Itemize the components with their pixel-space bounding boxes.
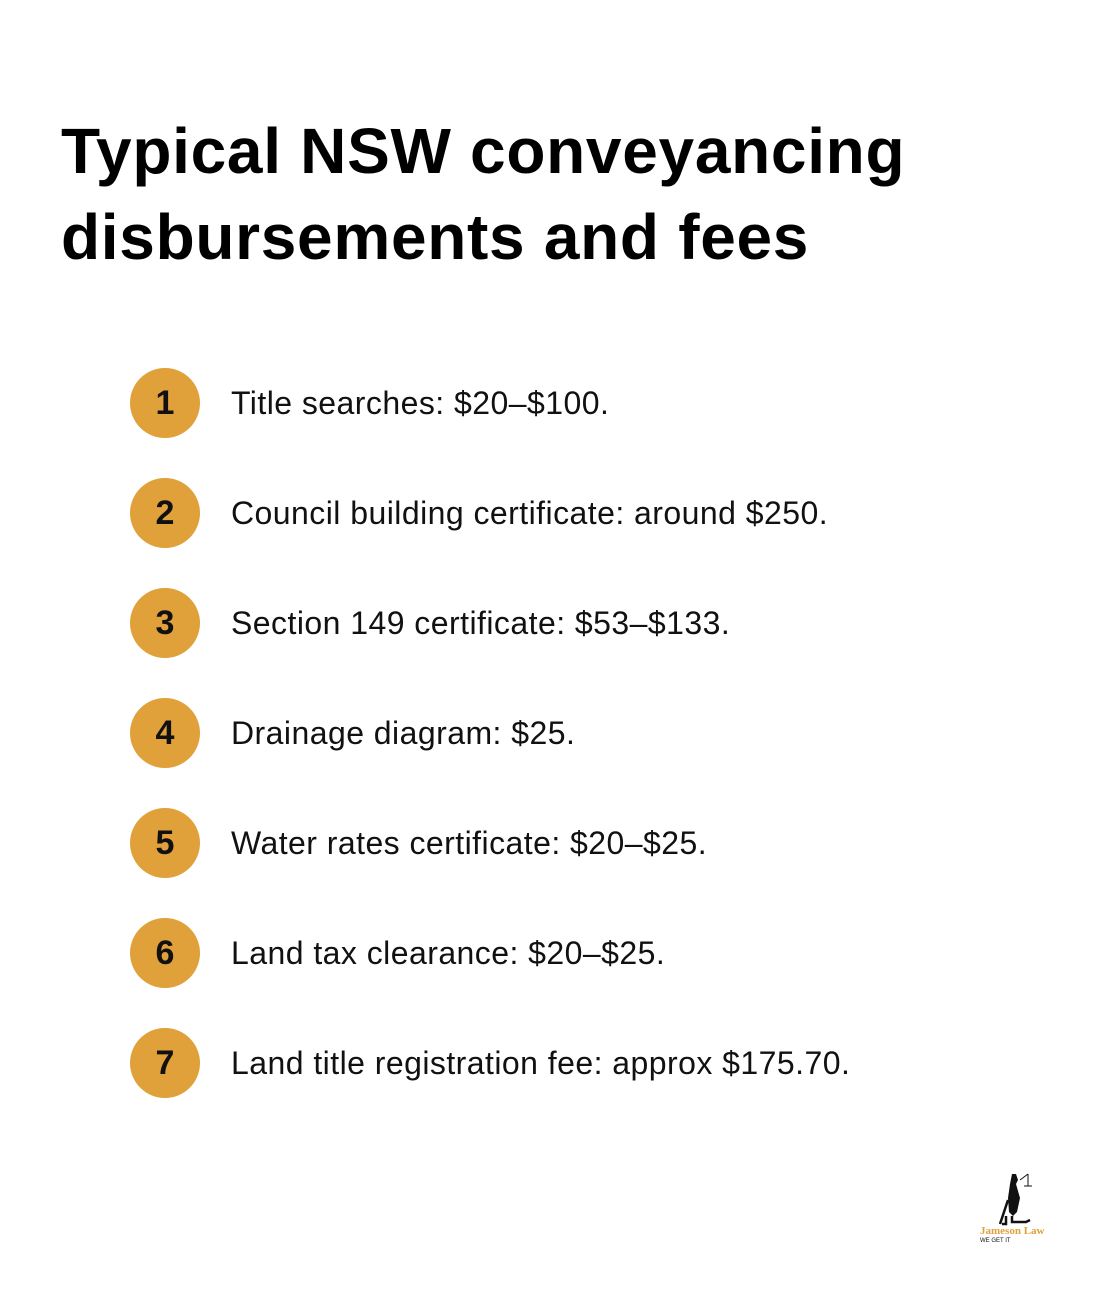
item 6: Land tax clearance: $20–$25. [231,935,665,971]
item 1 [130,368,609,438]
title: disbursements and fees [61,201,809,273]
item 4: Drainage diagram: $25. [231,715,575,751]
item 4: 4 [156,714,174,752]
item 2: Council building certificate: around $250. [231,495,828,531]
item 4 [130,698,575,768]
item 7 [130,1028,850,1098]
item 5 [130,808,707,878]
item 7: 7 [156,1044,174,1082]
item 5: 5 [156,824,174,862]
item 5: Water rates certificate: $20–$25. [231,825,707,861]
item 1: Title searches: $20–$100. [231,385,609,421]
logo [980,1174,1045,1244]
logo: WE GET IT [980,1238,1011,1244]
item 2: 2 [156,494,174,532]
item 7: Land title registration fee: approx $175.70. [231,1045,850,1081]
item 2 [130,478,828,548]
item 3 [130,588,730,658]
item 3: 3 [156,604,174,642]
item 6: 6 [156,934,174,972]
title [61,115,905,273]
title: Typical NSW conveyancing [61,115,905,187]
item 6 [130,918,665,988]
item 3: Section 149 certificate: $53–$133. [231,605,730,641]
logo: Jameson Law [980,1225,1045,1237]
item 1: 1 [156,384,174,422]
